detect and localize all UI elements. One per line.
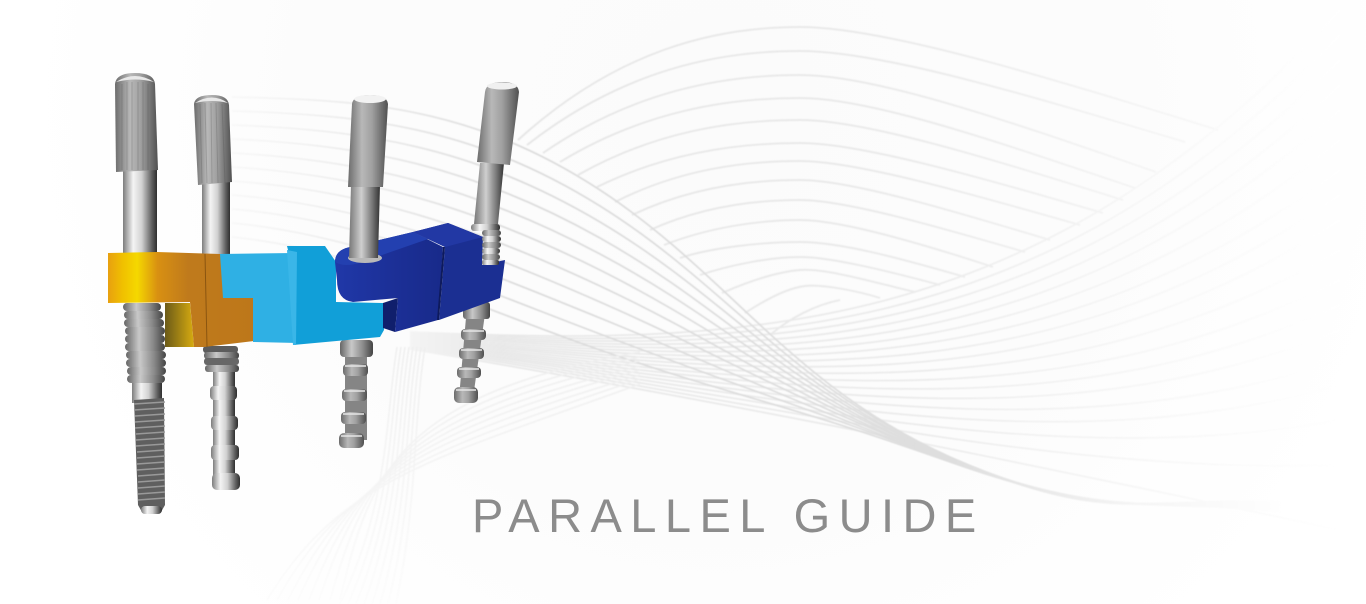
bracket: orange [108,252,254,347]
bracket: light blue [220,246,384,345]
pin 4 upper section [471,82,519,265]
pin 2 [194,95,240,490]
pin 3 lower section [339,340,373,448]
wave family: lower vertical lines [340,347,425,604]
pin 4 lower section [454,300,490,403]
pin 3 upper section [348,95,388,263]
wave family: descending lines [232,97,1280,512]
wave family: fan from the left convergence [410,10,1340,530]
bracket: dark blue right [413,223,505,320]
wave family: upper arcs [518,27,1218,335]
bracket: dark blue left [335,232,443,332]
wave family: lower left rising lines [267,352,640,600]
title: PARALLEL GUIDE [472,489,985,542]
icon: parallel guide device [108,73,519,514]
pin 1 [115,73,166,514]
background wave lines [232,10,1340,604]
